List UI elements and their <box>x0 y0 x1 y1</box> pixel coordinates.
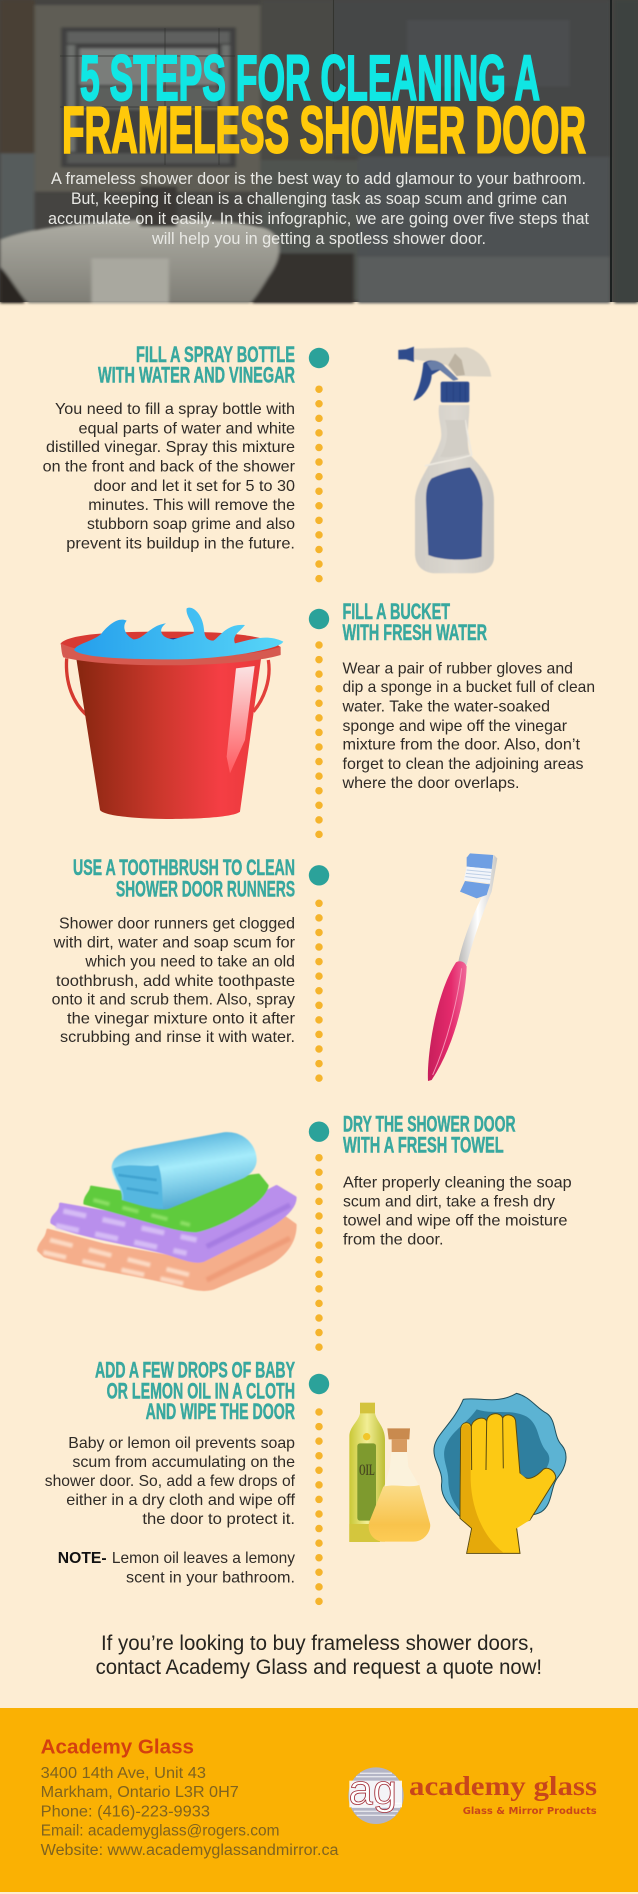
step 2 text <box>341 660 595 792</box>
step 4 marker <box>309 1122 329 1142</box>
step 4 dotted connector <box>315 1158 323 1348</box>
step 1 marker <box>309 348 329 368</box>
step 4 text: from the door. <box>343 1232 444 1249</box>
icon: toothbrush <box>428 853 497 1081</box>
title <box>62 42 586 166</box>
step 5 text: Baby or lemon oil prevents soap <box>68 1435 295 1452</box>
intro text: But, keeping it clean is a challenging task as soap scum and grime can <box>71 189 567 208</box>
step 3 dotted connector <box>315 903 323 1092</box>
step 5 heading <box>95 1358 295 1424</box>
step 3 text <box>52 915 295 1046</box>
step 1 text: distilled vinegar. Spray this mixture <box>46 439 295 456</box>
header panel <box>0 0 638 303</box>
step 4 heading <box>343 1112 516 1158</box>
step 3 heading: USE A TOOTHBRUSH TO CLEAN <box>73 855 295 880</box>
logo tagline: Glass & Mirror Products <box>463 1806 597 1817</box>
step 2 text: sponge and wipe off the vinegar <box>342 718 567 735</box>
step 1 heading <box>98 342 295 388</box>
step 3 marker <box>309 865 329 886</box>
step 2 heading: WITH FRESH WATER <box>342 620 487 645</box>
note: scent in your bathroom. <box>126 1570 295 1586</box>
logo <box>348 1766 597 1824</box>
step 2 text: mixture from the door. Also, don’t <box>342 737 581 754</box>
step 3 text: toothbrush, add white toothpaste <box>56 973 295 990</box>
logo wordmark: academy glass <box>409 1771 597 1801</box>
step 2 text: forget to clean the adjoining areas <box>342 756 584 773</box>
step 2 dotted connector <box>315 645 323 835</box>
step 4 panel <box>39 1112 572 1348</box>
icon: oil bottle and flask: OIL <box>359 1462 375 1479</box>
icon: gloved hand wiping with cloth <box>434 1393 566 1553</box>
icon: stack of towels <box>39 1132 295 1289</box>
step 1 text: door and let it set for 5 to 30 <box>94 478 295 495</box>
icon: oil bottle and flask <box>349 1403 430 1542</box>
step 1 dotted connector <box>315 389 323 579</box>
step 1 text: prevent its buildup in the future. <box>66 535 295 552</box>
note <box>58 1550 295 1586</box>
contact details <box>41 1737 339 1859</box>
step 4 text: After properly cleaning the soap <box>343 1174 572 1191</box>
step 5 text: shower door. So, add a few drops of <box>45 1473 296 1490</box>
step 1 text: You need to fill a spray bottle with <box>55 401 295 418</box>
step 4 heading: WITH A FRESH TOWEL <box>343 1133 504 1158</box>
contact details: Markham, Ontario L3R 0H7 <box>41 1784 239 1801</box>
step 1 text: stubborn soap grime and also <box>87 516 295 533</box>
icon: red bucket with water <box>61 608 283 819</box>
icon: spray bottle <box>398 347 494 573</box>
contact details: Phone: (416)-223-9933 <box>41 1803 210 1820</box>
step 5 heading: OR LEMON OIL IN A CLOTH <box>107 1378 295 1403</box>
footer background <box>0 1708 638 1892</box>
step 2 text: dip a sponge in a bucket full of clean <box>342 679 595 696</box>
step 1 heading: WITH WATER AND VINEGAR <box>98 362 295 388</box>
step 1 text: on the front and back of the shower <box>43 458 295 476</box>
contact details: Academy Glass <box>41 1737 194 1759</box>
step 3 heading <box>73 855 295 902</box>
step 3 text: which you need to take an old <box>84 954 295 971</box>
step 1 panel <box>43 342 494 579</box>
step 5 panel <box>45 1358 566 1602</box>
step 3 panel <box>52 853 497 1092</box>
closing call to action <box>96 1632 542 1679</box>
step 2 panel <box>61 599 595 835</box>
step 2 text: water. Take the water-soaked <box>341 698 550 716</box>
header photo: bathroom with tub and glass shower <box>0 0 638 303</box>
footer panel <box>0 1708 638 1892</box>
step 3 text: scrubbing and rinse it with water. <box>60 1029 295 1046</box>
intro text: accumulate on it easily. In this infographic, we are going over five steps that <box>48 209 589 228</box>
step 3 text: Shower door runners get clogged <box>59 915 295 932</box>
contact details: 3400 14th Ave, Unit 43 <box>41 1765 206 1782</box>
logo badge <box>348 1766 404 1824</box>
step 5 text: the door to protect it. <box>142 1511 295 1528</box>
closing call to action: contact Academy Glass and request a quote now! <box>96 1656 542 1679</box>
step 1 text: equal parts of water and white <box>78 420 295 437</box>
intro text <box>48 169 589 248</box>
contact details: Website: www.academyglassandmirror.ca <box>41 1842 339 1859</box>
step 5 heading: AND WIPE THE DOOR <box>146 1399 295 1424</box>
step 3 heading: SHOWER DOOR RUNNERS <box>116 877 295 902</box>
step 3 text: onto it and scrub them. Also, spray <box>52 991 295 1008</box>
step 2 text: where the door overlaps. <box>341 775 520 792</box>
step 5 marker <box>309 1374 329 1394</box>
step 4 heading: DRY THE SHOWER DOOR <box>343 1112 516 1137</box>
closing call to action: If you’re looking to buy frameless shower doors, <box>101 1632 534 1655</box>
logo badge: ag <box>349 1766 397 1813</box>
step 2 heading: FILL A BUCKET <box>342 599 450 624</box>
step 1 heading: FILL A SPRAY BOTTLE <box>136 342 295 367</box>
step 5 text: scum from accumulating on the <box>72 1454 295 1471</box>
step 3 text: the vinegar mixture onto it after <box>67 1010 295 1027</box>
note: NOTE- <box>58 1550 107 1567</box>
contact details: Email: academyglass@rogers.com <box>41 1823 280 1840</box>
step 5 text <box>45 1435 296 1528</box>
intro text: will help you in getting a spotless shower door. <box>151 229 486 248</box>
step 1 text <box>43 401 295 552</box>
step 5 text: either in a dry cloth and wipe off <box>66 1492 296 1509</box>
step 2 text: Wear a pair of rubber gloves and <box>342 660 573 677</box>
step 2 heading <box>342 599 487 645</box>
note: Lemon oil leaves a lemony <box>112 1550 295 1567</box>
step 3 text: with dirt, water and soap scum for <box>53 934 295 951</box>
step 1 text: minutes. This will remove the <box>88 497 295 514</box>
intro text: A frameless shower door is the best way to add glamour to your bathroom. <box>51 169 586 188</box>
step 5 heading: ADD A FEW DROPS OF BABY <box>95 1358 295 1382</box>
step 4 text: towel and wipe off the moisture <box>343 1213 568 1230</box>
step 4 text: scum and dirt, take a fresh dry <box>343 1194 555 1211</box>
step 2 marker <box>309 609 329 629</box>
step 4 text <box>343 1174 572 1249</box>
step 5 dotted connector <box>315 1412 323 1602</box>
